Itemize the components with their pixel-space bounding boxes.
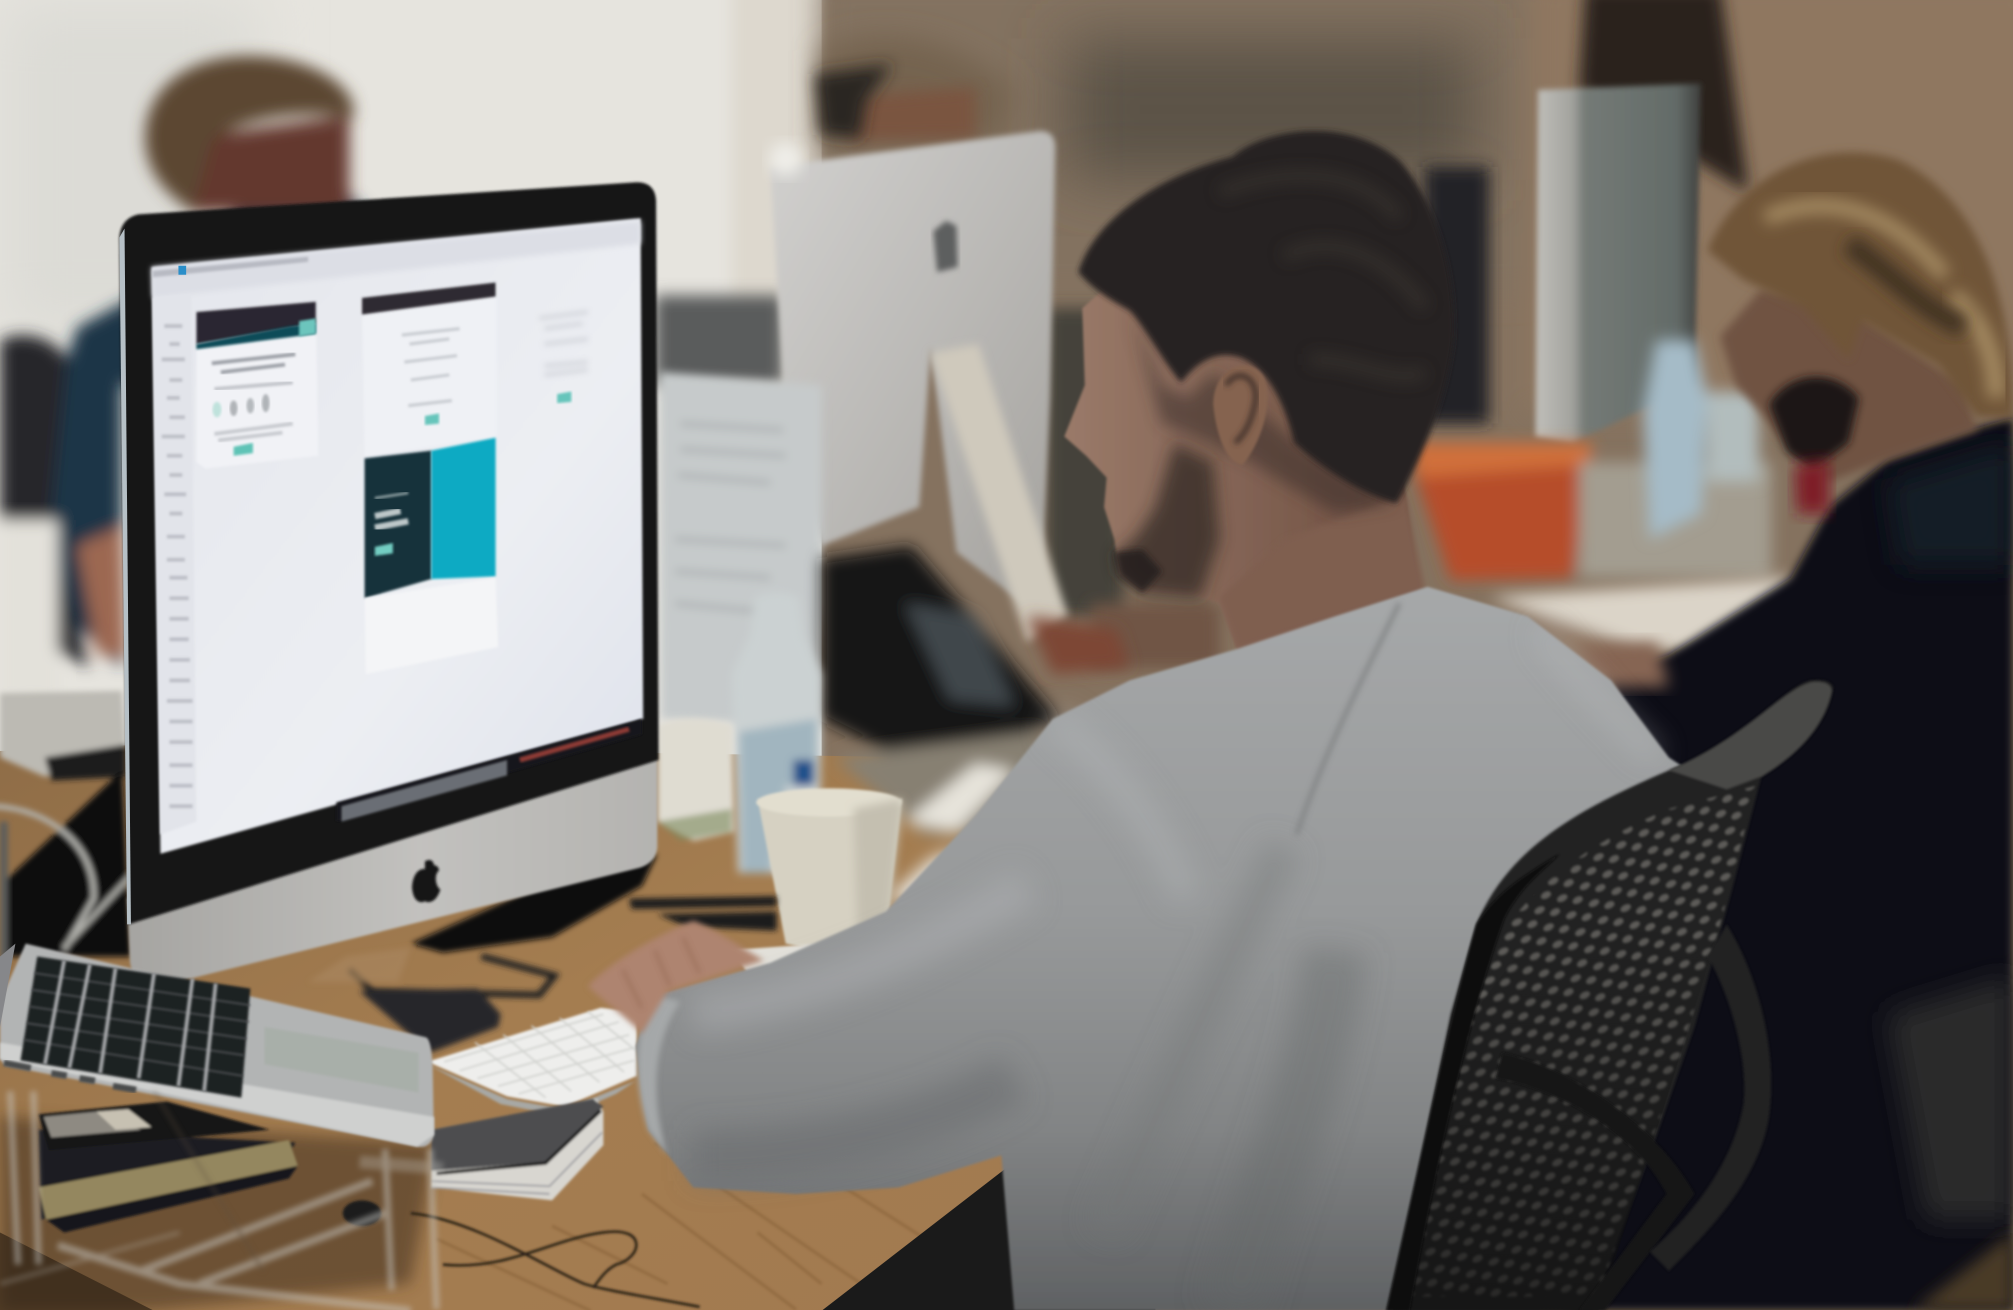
dark gear and tablet on desk xyxy=(822,546,1130,905)
mesh office chair xyxy=(1387,680,1833,1310)
foreground vignette bottom right xyxy=(1913,1232,2013,1310)
cables and black pad behind keyboard xyxy=(308,854,777,1053)
main desk xyxy=(0,745,1155,1310)
earphone cable xyxy=(343,1200,700,1307)
background person left xyxy=(0,56,372,713)
hand on desk xyxy=(1573,642,1669,687)
layers sidebar xyxy=(153,294,196,834)
sweater cuff xyxy=(638,995,680,1155)
background person right xyxy=(1566,153,2013,1310)
facial stubble xyxy=(1114,443,1220,598)
chair left frame xyxy=(1387,854,1560,1310)
chair top highlight xyxy=(1669,682,1832,790)
white box on desk xyxy=(657,719,734,841)
back desk surface xyxy=(1425,565,1791,680)
sweater shoulder seam xyxy=(1297,603,1399,834)
left desk clutter and cables xyxy=(0,691,131,963)
laptop keyboard xyxy=(21,956,250,1098)
background silver cylinder xyxy=(1535,83,1701,443)
MacBook laptop on stand xyxy=(0,944,434,1147)
laptop side ports xyxy=(4,1063,136,1090)
icon: apple logo xyxy=(412,860,440,902)
books and phone under laptop xyxy=(39,1102,298,1232)
temple and nape fade xyxy=(1130,308,1397,514)
paper cup xyxy=(756,788,903,949)
face and neck xyxy=(1720,289,1977,481)
main iMac monitor xyxy=(119,182,659,986)
beard xyxy=(1769,377,1859,470)
hair xyxy=(1078,131,1454,503)
chair back xyxy=(1387,680,1833,1310)
chair armrest frame xyxy=(1496,1053,1695,1310)
background orange box xyxy=(1412,443,1772,580)
water bottle on back desk xyxy=(1643,340,1759,539)
hand on keyboard xyxy=(588,920,764,1033)
black notebook xyxy=(431,1099,603,1200)
dark jumper xyxy=(1566,417,2013,1310)
background iMac rear xyxy=(769,131,1068,642)
laptop trackpad xyxy=(264,1027,419,1093)
artboard: landing page xyxy=(362,282,588,457)
app toolbar xyxy=(151,221,641,298)
artboard: website mobile preview xyxy=(196,302,318,469)
dock xyxy=(336,719,642,822)
iMac silver chin xyxy=(127,757,657,986)
artboard: teal hero block xyxy=(365,438,498,674)
man: designer from behind xyxy=(588,131,1707,1310)
hair xyxy=(1707,153,2013,417)
background person centre xyxy=(815,37,1014,141)
ear xyxy=(1213,365,1267,465)
clear acrylic laptop stand xyxy=(0,1091,443,1310)
iMac screen xyxy=(151,218,643,854)
iMac black bezel xyxy=(119,182,659,924)
sweater folds xyxy=(693,629,1656,1310)
neck and face xyxy=(1064,244,1419,655)
clear plastic bag and papers behind iMac xyxy=(660,372,822,725)
keyboard xyxy=(428,944,834,1117)
water bottle by monitor xyxy=(732,592,822,873)
sweater body xyxy=(635,587,1707,1310)
